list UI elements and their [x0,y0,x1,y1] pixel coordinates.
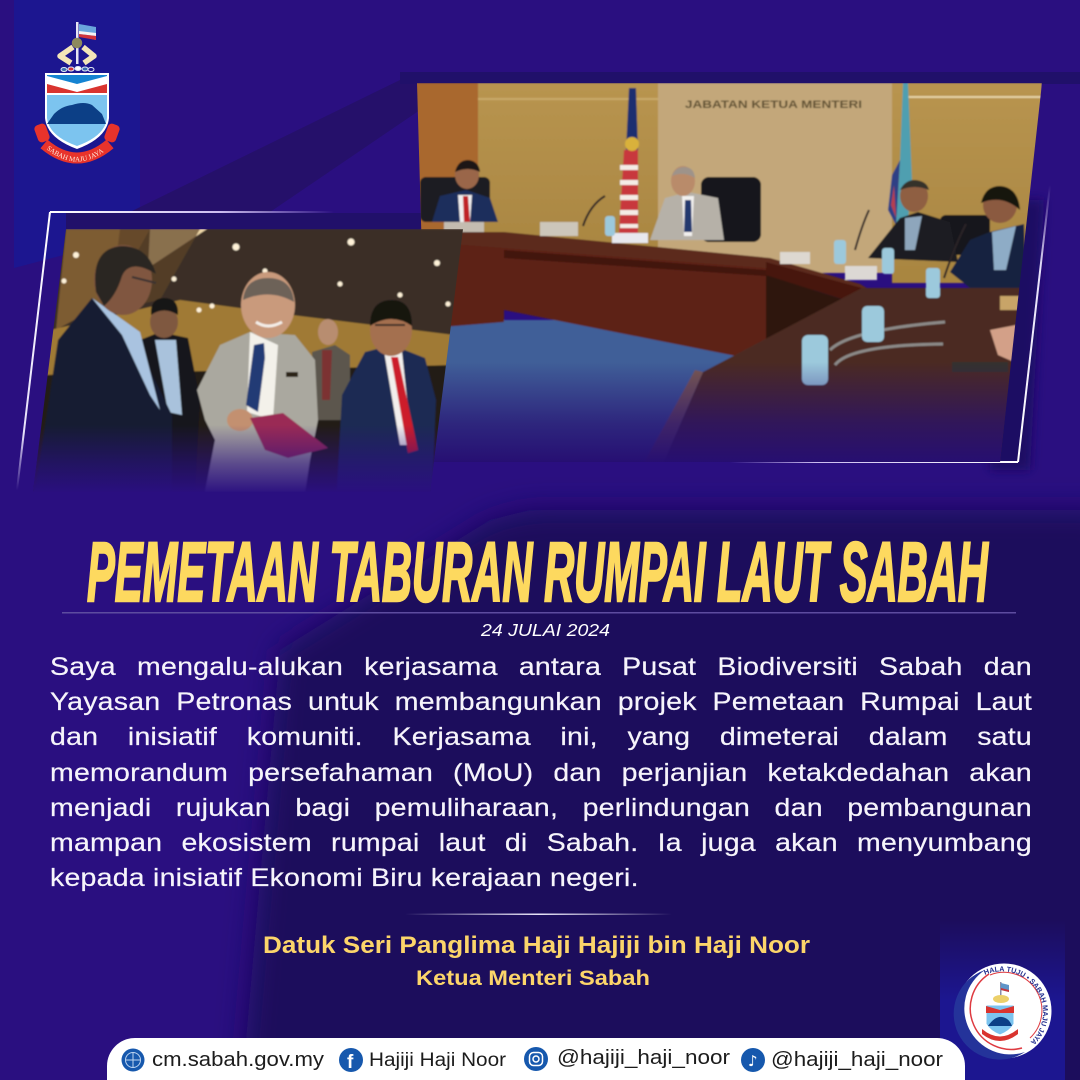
photo: meeting room [400,83,1060,470]
Malaysian flag [619,88,639,233]
seal emblem [982,982,1018,1041]
tiktok: @hajiji_haji_noor [771,1049,943,1071]
conference table [450,231,1020,462]
person: man on right [337,300,436,490]
seal: Hala Tuju Sabah Maju Jaya [954,964,1052,1060]
instagram: @hajiji_haji_noor [557,1047,730,1069]
red folder [250,413,328,458]
signature divider [405,914,672,915]
person: background man in grey [312,319,350,420]
Sabah flag [888,83,912,225]
tiktok: ♪ [748,1052,758,1070]
crest wreath [61,66,94,72]
title divider [62,612,1016,614]
person: chief minister [650,166,724,240]
bottom fade [434,366,1010,462]
signatory role: Ketua Menteri Sabah [416,967,650,990]
wall [48,299,450,376]
tiktok [741,1048,943,1072]
social media bar [107,1038,965,1080]
body text: kepada inisiatif Ekonomi Biru kerajaan negeri. [50,864,639,892]
bottom fade [33,428,438,492]
body text [50,653,1032,892]
website: cm.sabah.gov.my [152,1049,324,1071]
shield [45,73,109,149]
body text: memorandum persefahaman (MoU) dan perjanjian ketakdedahan akan [50,759,1032,787]
person: right delegate one [868,180,958,262]
wood column [417,83,479,230]
carpet [430,320,750,462]
crest hands [60,40,94,63]
wall panels [478,83,1042,283]
desk items [444,222,1022,372]
seal text: HALA TUJU • SABAH MAJU JAYA [984,966,1048,1044]
person: left delegate [432,160,498,222]
person: man on left [40,245,172,472]
person: man with songkok [141,298,200,445]
date: 24 JULAI 2024 [480,620,610,640]
body text: menjadi rujukan bagi pemuliharaan, perlindungan dan pembangunan [50,794,1032,822]
motto ribbon: SABAH MAJU JAYA [46,146,104,162]
facebook: Hajiji Haji Noor [369,1050,507,1071]
ceiling [30,229,470,339]
signatory name: Datuk Seri Panglima Haji Hajiji bin Haji Noor [263,932,810,959]
logo: Sabah coat of arms [34,22,120,164]
microphones [583,196,966,365]
chairs [420,177,990,255]
photo frame: left [17,211,334,490]
ceiling spotlights [62,238,450,312]
body text: Yayasan Petronas untuk membangunkan projek Pemetaan Rumpai Laut [50,688,1032,716]
motto ribbon [34,124,120,164]
flagpole and flag [76,22,96,64]
body text: Saya mengalu-alukan kerjasama antara Pusat Biodiversiti Sabah dan [50,653,1032,681]
facebook [339,1048,507,1073]
photo: chief minister walking with delegates [20,229,480,494]
water bottles [605,216,940,385]
body text: dan inisiatif komuniti. Kerjasama ini, yang dimeterai dalam satu [50,723,1032,751]
body text: mampan ekosistem rumpai laut di Sabah. Ia juga akan menyumbang [50,829,1032,857]
wall sign: JABATAN KETUA MENTERI [685,99,862,111]
person: chief minister [197,272,318,492]
facebook: f [347,1052,354,1073]
instagram [524,1047,730,1071]
crowd shadow behind people [33,365,455,492]
photo frame: right [730,185,1050,463]
person: right delegate two [950,186,1026,290]
